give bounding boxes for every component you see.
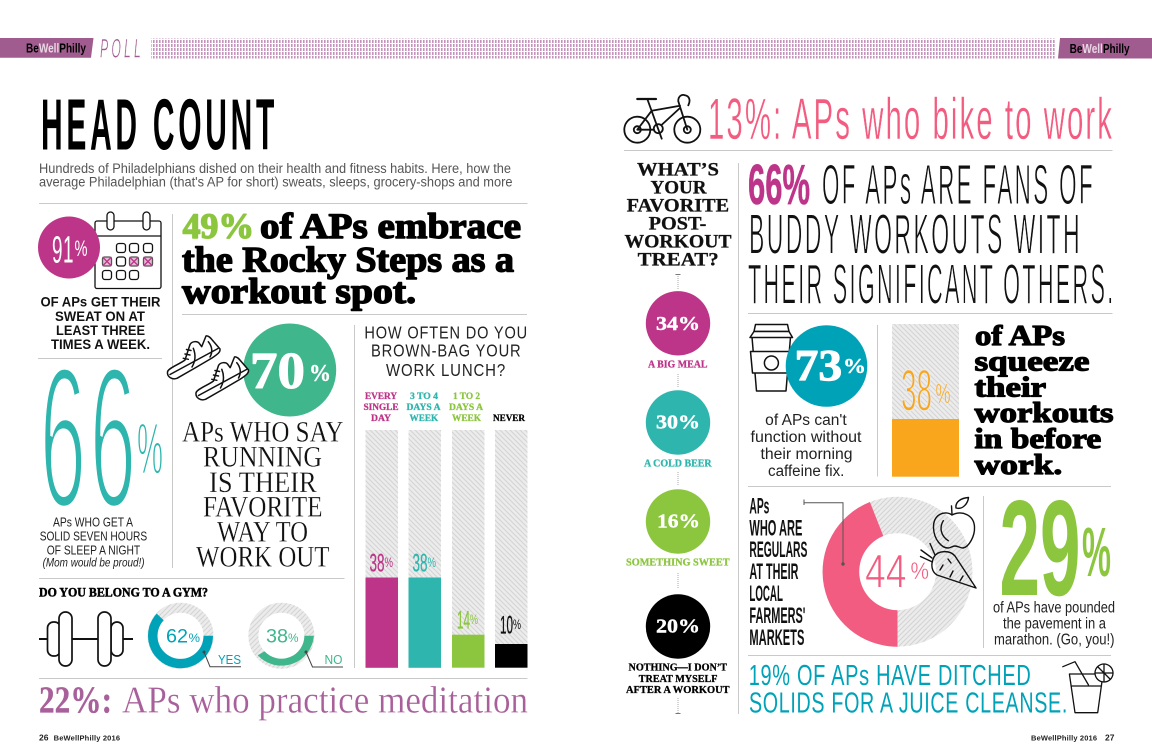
bar: 3 to 4 days a week: DAYS A bbox=[406, 403, 441, 413]
banner: 22% meditation: APs who practice meditation bbox=[122, 680, 528, 722]
text: POLL bbox=[100, 34, 144, 64]
treat: big meal 34%: 34% bbox=[656, 313, 700, 335]
bar: 1 to 2 days a week: % bbox=[470, 611, 478, 627]
bar chart: brown-bag lunch bbox=[364, 322, 528, 668]
caption: SWEAT ON AT bbox=[55, 309, 146, 324]
headline: 49% Rocky Steps: workout spot. bbox=[182, 271, 416, 311]
stat: 91% exercise: % bbox=[74, 236, 88, 261]
stat: 91% exercise: 91 bbox=[52, 230, 74, 272]
caption: their bbox=[974, 372, 1046, 404]
headline: 49% Rocky Steps: 49% bbox=[183, 206, 254, 246]
bar: every single day: DAY bbox=[371, 414, 391, 424]
headline: 49% Rocky Steps: the Rocky Steps as a bbox=[182, 240, 514, 280]
text: HEAD COUNT bbox=[41, 86, 278, 166]
footer: page 26: 26 bbox=[39, 733, 49, 743]
question heading: FAVORITE bbox=[627, 195, 729, 216]
stat: 91% exercise bbox=[38, 212, 161, 352]
treat: nothing 20%: AFTER A WORKOUT bbox=[626, 685, 730, 696]
bar: 1 to 2 days a week: 1 TO 2 bbox=[453, 392, 480, 402]
caption: of APs can't bbox=[765, 412, 847, 429]
treat: cold beer 30%: 30% bbox=[656, 412, 700, 434]
bar: every single day: % bbox=[384, 554, 393, 570]
caption: AT THEIR bbox=[749, 559, 798, 584]
caption: MARKETS bbox=[749, 625, 804, 650]
donut: yes 62%: 62 bbox=[166, 627, 188, 648]
donut: no 38% bbox=[253, 608, 343, 667]
stat: 38% before work: 38 bbox=[901, 359, 932, 424]
donut: yes 62% bbox=[148, 608, 241, 668]
caption: WAY TO bbox=[217, 516, 308, 549]
bar: every single day: SINGLE bbox=[364, 403, 398, 413]
treat: something sweet 16%: 16% bbox=[657, 511, 700, 533]
donut chart: 44 bbox=[865, 544, 906, 597]
caption: squeeze bbox=[974, 346, 1090, 378]
donut: no 38%: NO bbox=[324, 652, 342, 667]
banner: 22% meditation: 22%: bbox=[39, 680, 112, 722]
bar: 1 to 2 days a week bbox=[449, 392, 484, 668]
intro text bbox=[39, 161, 512, 190]
treat: nothing 20%: NOTHING—I DON’T bbox=[628, 663, 727, 674]
icon: bicycle bbox=[624, 95, 700, 143]
caption bbox=[749, 493, 807, 650]
stat: 44% farmers' markets: REGULARS bbox=[749, 537, 807, 562]
caption: SOLID SEVEN HOURS bbox=[40, 530, 147, 544]
question heading: WORKOUT bbox=[624, 231, 732, 252]
caption: WORK OUT bbox=[196, 541, 330, 574]
stat: 70% running: % bbox=[309, 361, 331, 387]
stat: 29% marathon: % bbox=[1082, 513, 1111, 591]
heading: DO YOU BELONG TO A GYM? bbox=[39, 585, 208, 600]
icon: barbell bbox=[39, 612, 133, 666]
bar: 3 to 4 days a week bbox=[406, 392, 441, 668]
bar: 1 to 2 days a week: WEEK bbox=[452, 414, 482, 424]
bar: 3 to 4 days a week: WEEK bbox=[410, 414, 439, 424]
treat: something sweet 16% bbox=[626, 489, 730, 569]
caption: OF APs GET THEIR bbox=[40, 295, 161, 310]
question heading bbox=[624, 159, 732, 270]
bar: never: NEVER bbox=[493, 414, 525, 424]
caption: IS THEIR bbox=[209, 466, 317, 499]
chart heading: BROWN-BAG YOUR bbox=[371, 341, 522, 361]
treat: cold beer 30% bbox=[644, 390, 712, 470]
headline: 49% Rocky Steps bbox=[182, 206, 521, 311]
gym question bbox=[39, 585, 343, 668]
header stripe band bbox=[151, 38, 1056, 58]
caption bbox=[974, 320, 1114, 481]
header band: left tab: BeWellPhilly bbox=[26, 42, 86, 56]
icon: apple and carrot bbox=[920, 498, 976, 588]
bar: 1 to 2 days a week: 14 bbox=[457, 606, 470, 634]
treat: big meal 34% bbox=[646, 291, 710, 371]
caption: APs WHO SAY bbox=[182, 416, 344, 449]
circle: 70% bbox=[243, 324, 336, 416]
question heading: YOUR bbox=[650, 177, 707, 198]
bar: every single day bbox=[364, 392, 398, 668]
icon: juice glass bbox=[1063, 662, 1113, 713]
footer: page 27: BeWellPhilly 2016 bbox=[1031, 734, 1097, 743]
bar: never bbox=[493, 414, 528, 668]
stat: 38% before work: % bbox=[936, 378, 950, 409]
header band: right tab bbox=[1058, 38, 1152, 58]
bar: every single day: 38 bbox=[370, 550, 384, 578]
donut: no 38%: 38 bbox=[266, 627, 288, 648]
stat: 66% sleep bbox=[40, 326, 163, 570]
circle: 73% bbox=[786, 325, 867, 407]
caption: caffeine fix. bbox=[768, 463, 844, 480]
donut chart: % bbox=[910, 558, 929, 585]
caption: their morning bbox=[760, 446, 852, 463]
stat: 73% caffeine: % bbox=[843, 354, 866, 378]
stat: 73% caffeine: 73 bbox=[795, 341, 842, 390]
bar: 3 to 4 days a week: 38 bbox=[412, 550, 428, 578]
caption: marathon. (Go, you!) bbox=[994, 632, 1114, 649]
headline: 66% buddy workouts bbox=[748, 153, 1116, 316]
headline: 66% buddy workouts: 66% bbox=[748, 153, 810, 217]
stat: 44% farmers' markets bbox=[749, 493, 976, 650]
footer: page 27: 27 bbox=[1105, 733, 1115, 743]
stat: 73% caffeine bbox=[750, 324, 867, 480]
caption: workouts bbox=[974, 397, 1114, 429]
treat: nothing 20%: TREAT MYSELF bbox=[639, 674, 717, 685]
question heading: POST- bbox=[649, 213, 706, 234]
caption: LEAST THREE bbox=[56, 323, 145, 338]
caption: work. bbox=[974, 449, 1062, 481]
chart heading bbox=[364, 322, 528, 380]
banner: 19% juice cleanse: 19% OF APs HAVE DITCHED bbox=[749, 660, 1032, 692]
stat: 29% marathon bbox=[993, 472, 1115, 649]
calendar date squares bbox=[102, 244, 152, 280]
stat: 38% before work bbox=[892, 320, 1114, 481]
panel: post-workout treat bbox=[624, 159, 732, 714]
question heading: TREAT? bbox=[638, 249, 719, 270]
question heading: WHAT’S bbox=[637, 159, 719, 180]
caption bbox=[40, 516, 147, 570]
bar: never: 10 bbox=[500, 612, 513, 640]
bar: 3 to 4 days a week: 3 TO 4 bbox=[410, 392, 438, 402]
intro text: average Philadelphian (that's AP for short) sweats, sleeps, grocery-shops and more bbox=[39, 174, 512, 190]
caption: FAVORITE bbox=[203, 491, 322, 524]
caption: APs bbox=[749, 493, 769, 518]
stat: 70% running: 70 bbox=[250, 343, 305, 400]
caption: the pavement in a bbox=[1003, 616, 1106, 633]
donut chart bbox=[804, 500, 954, 647]
treat: cold beer 30%: A COLD BEER bbox=[644, 459, 712, 470]
headline: 49% Rocky Steps: of APs embrace bbox=[260, 206, 521, 246]
text: % bbox=[137, 410, 163, 490]
caption: of APs bbox=[975, 320, 1065, 352]
banner: 13% bike bbox=[624, 87, 1114, 152]
bar: never: % bbox=[513, 616, 521, 632]
banner: 19% juice cleanse bbox=[749, 660, 1113, 719]
chart heading: HOW OFTEN DO YOU bbox=[364, 322, 528, 342]
chart heading: WORK LUNCH? bbox=[386, 360, 506, 380]
bar: 3 to 4 days a week: % bbox=[428, 554, 436, 570]
caption bbox=[40, 295, 161, 352]
caption bbox=[182, 416, 344, 574]
caption bbox=[750, 412, 862, 480]
treat: nothing 20%: 20% bbox=[656, 616, 700, 638]
icon: coffee cup bbox=[750, 324, 792, 391]
caption: OF SLEEP A NIGHT bbox=[47, 544, 140, 558]
caption: LOCAL bbox=[749, 581, 783, 606]
caption: RUNNING bbox=[203, 441, 322, 474]
bar: every single day: EVERY bbox=[365, 392, 397, 402]
treat: something sweet 16%: SOMETHING SWEET bbox=[626, 558, 730, 569]
caption: in before bbox=[974, 423, 1101, 455]
stat: 70% running bbox=[167, 324, 344, 574]
header band: left tab bbox=[0, 38, 94, 58]
circle: 91% bbox=[38, 216, 100, 278]
caption: WHO ARE bbox=[749, 515, 802, 540]
icon: running shoes bbox=[167, 336, 249, 400]
footer: page 26: BeWellPhilly 2016 bbox=[54, 734, 120, 743]
caption: FARMERS' bbox=[749, 603, 805, 628]
bar: 1 to 2 days a week: DAYS A bbox=[449, 403, 483, 413]
caption: of APs have pounded bbox=[993, 600, 1115, 617]
stat: 66% sleep: 66 bbox=[40, 326, 140, 550]
treat: big meal 34%: A BIG MEAL bbox=[648, 360, 708, 371]
caption: TIMES A WEEK. bbox=[51, 337, 150, 352]
icon: calendar bbox=[95, 212, 161, 288]
stat: 29% marathon: 29 bbox=[1000, 472, 1080, 624]
donut: no 38%: % bbox=[288, 631, 299, 645]
intro text: Hundreds of Philadelphians dished on their health and fitness habits. Here, how the bbox=[39, 161, 511, 176]
header band: right tab: BeWellPhilly bbox=[1070, 42, 1130, 56]
caption: (Mom would be proud!) bbox=[43, 558, 145, 570]
caption: APs WHO GET A bbox=[53, 516, 134, 530]
caption: function without bbox=[750, 429, 862, 446]
caption bbox=[993, 600, 1115, 649]
donut: yes 62%: YES bbox=[218, 652, 241, 667]
treat: nothing 20% bbox=[626, 594, 730, 696]
donut: yes 62%: % bbox=[188, 631, 200, 645]
